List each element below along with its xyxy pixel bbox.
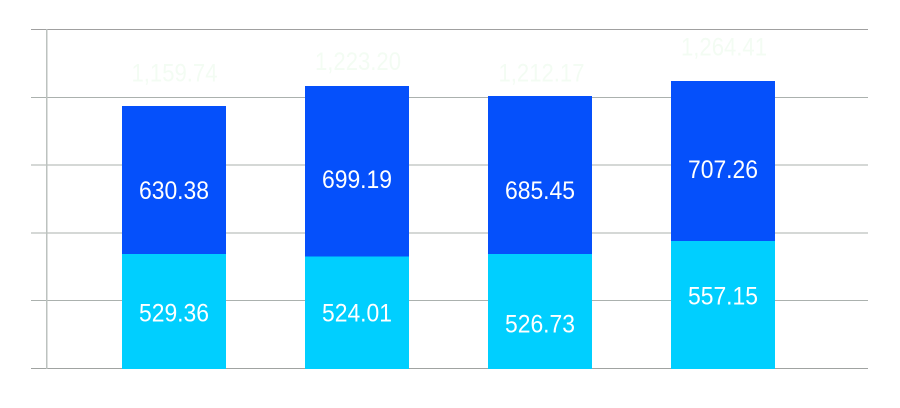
total labels — [132, 34, 767, 88]
bar group: column 4: 557.15 — [688, 282, 758, 310]
total labels: 1,223.20 — [315, 48, 401, 76]
bar group: column 1: 529.36 — [139, 300, 209, 328]
bar group: column 4: 707.26 — [688, 156, 758, 184]
bar group: column 2: 524.01 — [322, 300, 392, 328]
bar group: column 1: 630.38 — [139, 177, 209, 205]
bar group: column 2: 699.19 — [322, 166, 392, 194]
bar group: column 3: 685.45 — [505, 177, 575, 205]
bar group: column 1 — [122, 106, 226, 369]
total labels: 1,159.74 — [132, 60, 218, 88]
bar group: column 3 — [488, 96, 592, 369]
bar group: column 3: 526.73 — [505, 310, 575, 338]
bar group: column 2 — [305, 86, 409, 369]
total labels: 1,264.41 — [681, 34, 767, 62]
bar group: column 4 — [671, 81, 775, 369]
total labels: 1,212.17 — [498, 60, 584, 88]
